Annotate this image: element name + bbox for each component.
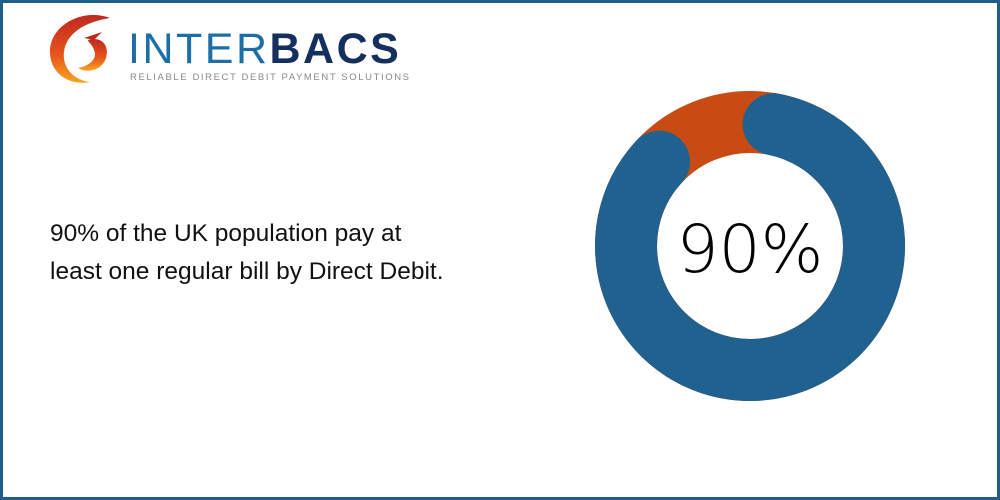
donut chart bbox=[594, 91, 905, 401]
text block: statistic bbox=[50, 220, 444, 285]
text block: statistic: least one regular bill by Direct Debit. bbox=[50, 258, 444, 285]
logo tagline: RELIABLE DIRECT DEBIT PAYMENT SOLUTIONS bbox=[130, 72, 411, 83]
icon: phoenix swirl bbox=[50, 15, 110, 83]
logo wordmark: INTERBACS bbox=[128, 25, 401, 73]
donut label: 90% bbox=[677, 211, 823, 288]
text block: statistic: 90% of the UK population pay at bbox=[50, 220, 401, 247]
logo bbox=[50, 15, 411, 83]
